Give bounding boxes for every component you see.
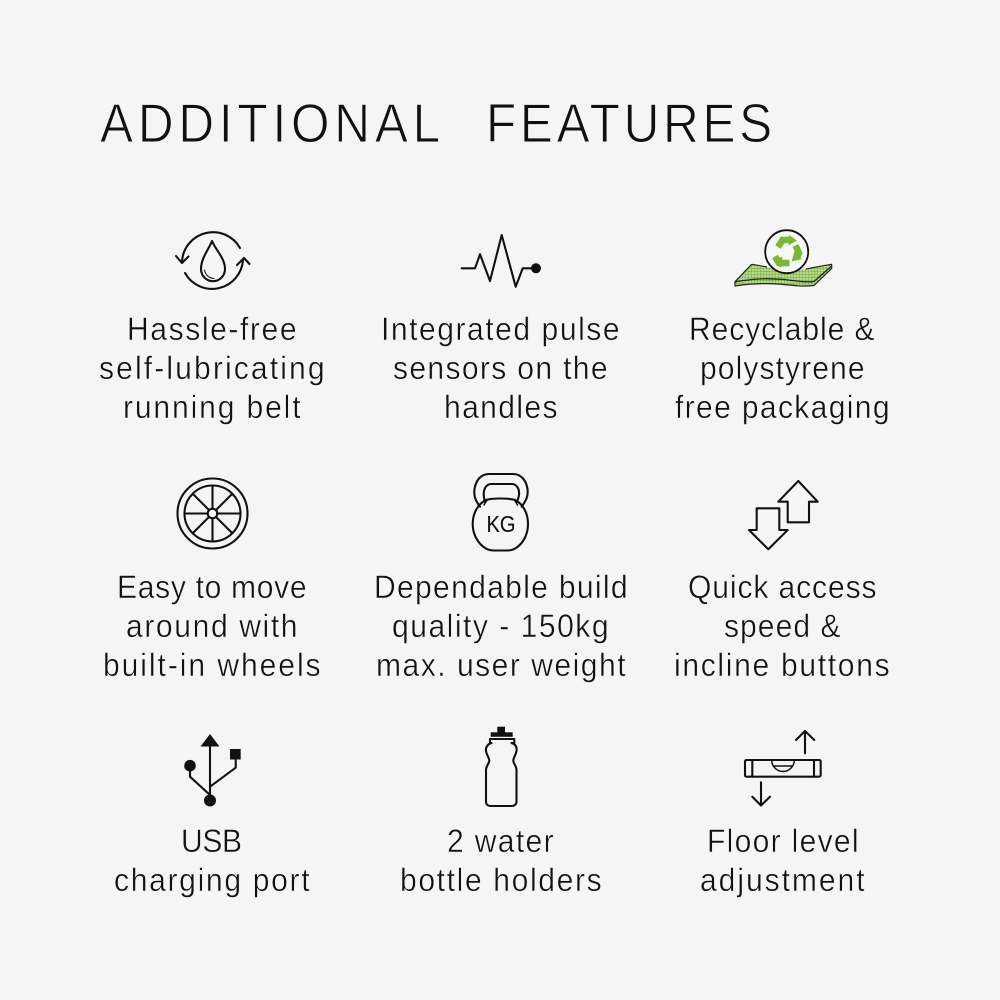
panel: self-lubricating running belt (99, 232, 325, 425)
text: integrated pulse sensors on the handles: handles (444, 389, 558, 425)
title: FEATURES (486, 93, 772, 154)
icon: water drop with circular arrows (176, 232, 250, 289)
text: floor level adjustment: adjustment (700, 862, 865, 898)
text: 2 water bottle holders (400, 823, 602, 898)
icon: wheel (178, 478, 248, 548)
text: usb charging port: charging port (114, 862, 310, 898)
panel: recyclable packaging (675, 230, 890, 425)
icon: water bottle (486, 727, 517, 806)
panel: floor level adjustment (700, 731, 865, 898)
icon: pulse line (462, 235, 541, 287)
text: recyclable and polystyrene free packaging (675, 311, 890, 425)
text: quick access speed and incline buttons: incline buttons (674, 647, 890, 683)
text: integrated pulse sensors on the handles: sensors on the (393, 350, 608, 386)
text: hassle-free self-lubricating running belt: Hassle-free (127, 311, 297, 347)
text: hassle-free self-lubricating running belt (99, 311, 325, 425)
text: dependable build quality 150kg max user weight: Dependable build (374, 569, 628, 605)
icon: spirit level with arrows (745, 731, 821, 806)
text: floor level adjustment: Floor level (707, 823, 859, 859)
text: integrated pulse sensors on the handles: Integrated pulse (381, 311, 620, 347)
icon: usb symbol (184, 734, 241, 806)
text: 2 water bottle holders: 2 water (447, 823, 554, 859)
icon: kettlebell: KG (486, 511, 516, 537)
text: easy to move around with built-in wheels (103, 569, 321, 683)
text: recyclable and polystyrene free packaging: Recyclable & (689, 311, 875, 347)
panel: water bottle holders (400, 727, 602, 898)
text: hassle-free self-lubricating running belt: self-lubricating (99, 350, 325, 386)
title (100, 93, 772, 154)
text: usb charging port: USB (181, 823, 242, 859)
text: dependable build quality 150kg max user weight (374, 569, 628, 683)
icon: up and down arrows (749, 481, 818, 549)
text: quick access speed and incline buttons: speed & (724, 608, 841, 644)
text: recyclable and polystyrene free packaging: free packaging (675, 389, 890, 425)
text: easy to move around with built-in wheels: built-in wheels (103, 647, 321, 683)
text: quick access speed and incline buttons: Quick access (688, 569, 877, 605)
panel: usb charging port (114, 734, 310, 898)
panel: built-in wheels (103, 478, 321, 683)
icon: kettlebell (473, 474, 528, 550)
text: quick access speed and incline buttons (674, 569, 890, 683)
text: dependable build quality 150kg max user weight: max. user weight (376, 647, 626, 683)
text: integrated pulse sensors on the handles (381, 311, 620, 425)
text: floor level adjustment (700, 823, 865, 898)
text: dependable build quality 150kg max user weight: quality - 150kg (392, 608, 609, 644)
text: easy to move around with built-in wheels: Easy to move (117, 569, 307, 605)
panel: quick access buttons (674, 481, 890, 683)
text: hassle-free self-lubricating running belt: running belt (123, 389, 301, 425)
text: usb charging port (114, 823, 310, 898)
text: easy to move around with built-in wheels: around with (126, 608, 298, 644)
text: recyclable and polystyrene free packaging: polystyrene (700, 350, 865, 386)
panel: integrated pulse sensors (381, 235, 620, 425)
text: 2 water bottle holders: bottle holders (400, 862, 602, 898)
title: ADDITIONAL (100, 93, 440, 154)
icon: recycling badge on green mat (735, 230, 832, 286)
panel: build quality (374, 474, 628, 683)
